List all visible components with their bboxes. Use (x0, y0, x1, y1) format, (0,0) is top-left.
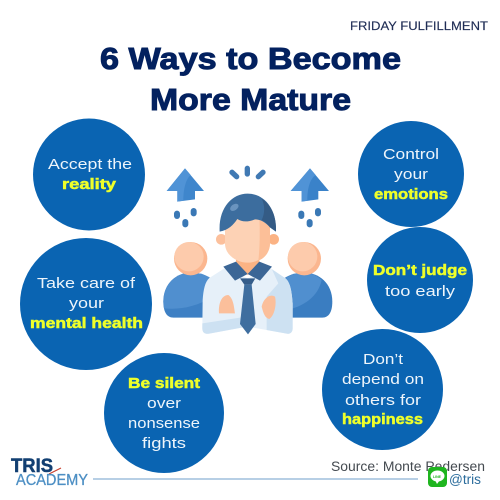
icon: head (216, 194, 279, 263)
icon: right dots (298, 208, 321, 227)
icon: right arrow (291, 168, 329, 202)
icon: neck and collar (223, 258, 272, 281)
panel: be silent over nonsense fights: Be silent (128, 375, 200, 392)
title: More Mature (150, 82, 351, 117)
panel: don't judge too early: too early (385, 283, 456, 300)
panel: don't judge too early: Don’t judge (373, 262, 467, 279)
panel: be silent over nonsense fights: over (147, 395, 181, 412)
panel: control your emotions: Control (383, 146, 439, 163)
panel: don't judge too early (367, 227, 473, 333)
LINE handle: @tris (449, 472, 481, 487)
logo: Tris Academy: TRIS (11, 456, 53, 477)
panel: don't depend on others for happiness: happiness (342, 411, 423, 428)
panel: control your emotions: your (394, 166, 428, 183)
icon: LINE (428, 467, 447, 487)
footer line (93, 478, 418, 480)
panel: don't depend on others for happiness: Don’t (363, 351, 404, 368)
icon: emphasis ticks (232, 168, 263, 177)
panel: accept the reality: Accept the (48, 156, 132, 173)
panel: be silent over nonsense fights: fights (142, 435, 186, 452)
panel: don't depend on others for happiness (322, 329, 443, 450)
panel: control your emotions (358, 121, 464, 227)
panel: be silent over nonsense fights (104, 353, 224, 473)
panel: take care of your mental health: mental health (30, 315, 143, 332)
icon: right person (282, 242, 332, 318)
panel: accept the reality: reality (62, 176, 117, 193)
title: 6 Ways to Become (100, 41, 401, 76)
panel: accept the reality (33, 118, 145, 230)
title (100, 41, 401, 117)
panel: take care of your mental health: Take care of (37, 275, 136, 292)
icon: left person (163, 242, 213, 318)
panel: don't depend on others for happiness: depend on (342, 371, 424, 388)
logo: Tris Academy: ACADEMY (16, 472, 88, 489)
icon: tie (240, 278, 256, 334)
icon: shirt (202, 269, 293, 334)
icon: left dots (174, 208, 197, 227)
panel: be silent over nonsense fights: nonsense (128, 415, 200, 432)
icon: LINE: LINE (433, 475, 442, 479)
panel: don't depend on others for happiness: others for (345, 392, 421, 409)
central illustration: mature leader with two people (163, 168, 332, 334)
logo: Tris Academy (11, 456, 88, 489)
series label: FRIDAY FULFILLMENT (350, 19, 489, 33)
panel: control your emotions: emotions (374, 186, 448, 203)
icon: left arrow (167, 168, 204, 202)
panel: take care of your mental health: your (69, 295, 104, 312)
panel: take care of your mental health (20, 238, 152, 370)
source credit: Source: Monte Pedersen (331, 459, 485, 474)
